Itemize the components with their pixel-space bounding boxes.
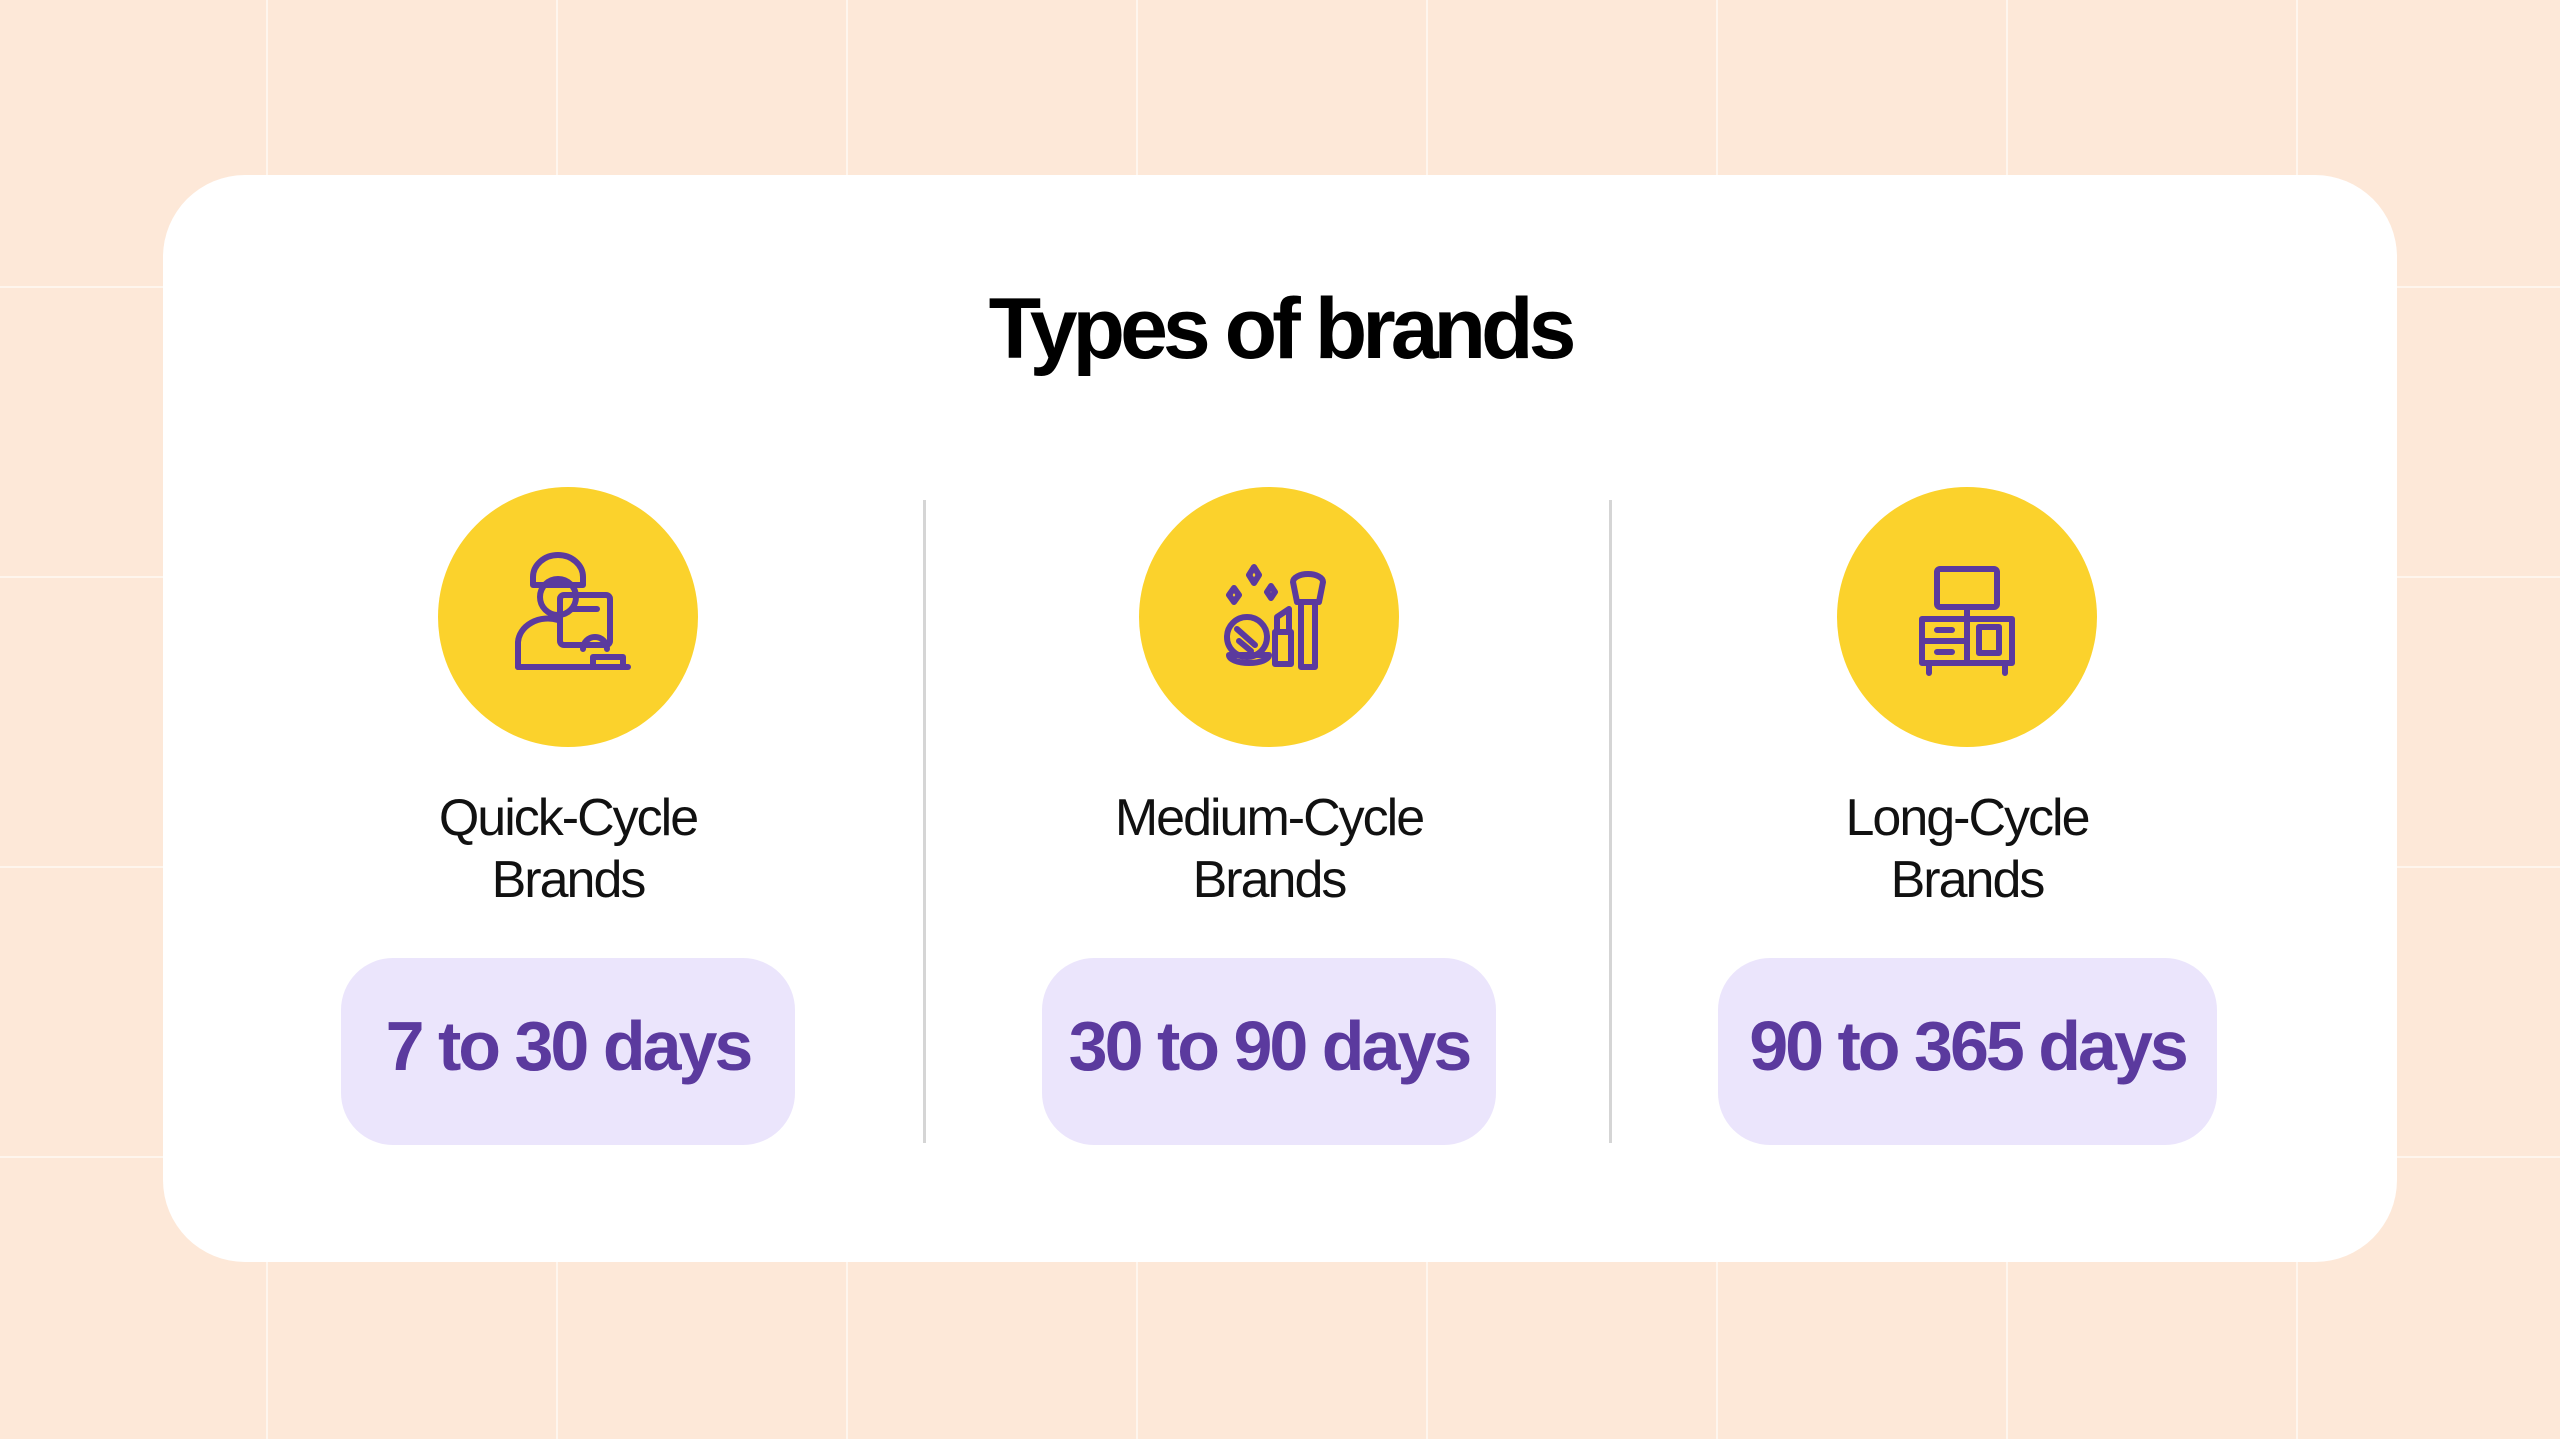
pill: 30 to 90 days: 30 to 90 days xyxy=(1069,1006,1469,1084)
label: long-cycle: Brands xyxy=(1891,851,2043,909)
card xyxy=(163,175,2397,1262)
pill: 7 to 30 days: 7 to 30 days xyxy=(386,1006,750,1084)
divider 1 xyxy=(923,500,926,1143)
pill: 90 to 365 days: 90 to 365 days xyxy=(1749,1006,2186,1084)
label: quick-cycle: Brands xyxy=(492,851,644,909)
pill: 7 to 30 days xyxy=(341,958,795,1145)
pill: 90 to 365 days xyxy=(1718,958,2217,1145)
label: medium-cycle: Brands xyxy=(1193,851,1345,909)
divider 2 xyxy=(1609,500,1612,1143)
pill: 30 to 90 days xyxy=(1042,958,1496,1145)
label: medium-cycle: Medium-Cycle xyxy=(1115,789,1423,847)
label: long-cycle: Long-Cycle xyxy=(1845,789,2089,847)
title: Types of brands xyxy=(989,281,1571,377)
label: medium-cycle xyxy=(1115,789,1423,909)
label: quick-cycle xyxy=(439,789,697,909)
icon: cosmetics xyxy=(1139,487,1399,747)
icon: furniture xyxy=(1837,487,2097,747)
label: long-cycle xyxy=(1845,789,2089,909)
icon: delivery person xyxy=(438,487,698,747)
label: quick-cycle: Quick-Cycle xyxy=(439,789,697,847)
